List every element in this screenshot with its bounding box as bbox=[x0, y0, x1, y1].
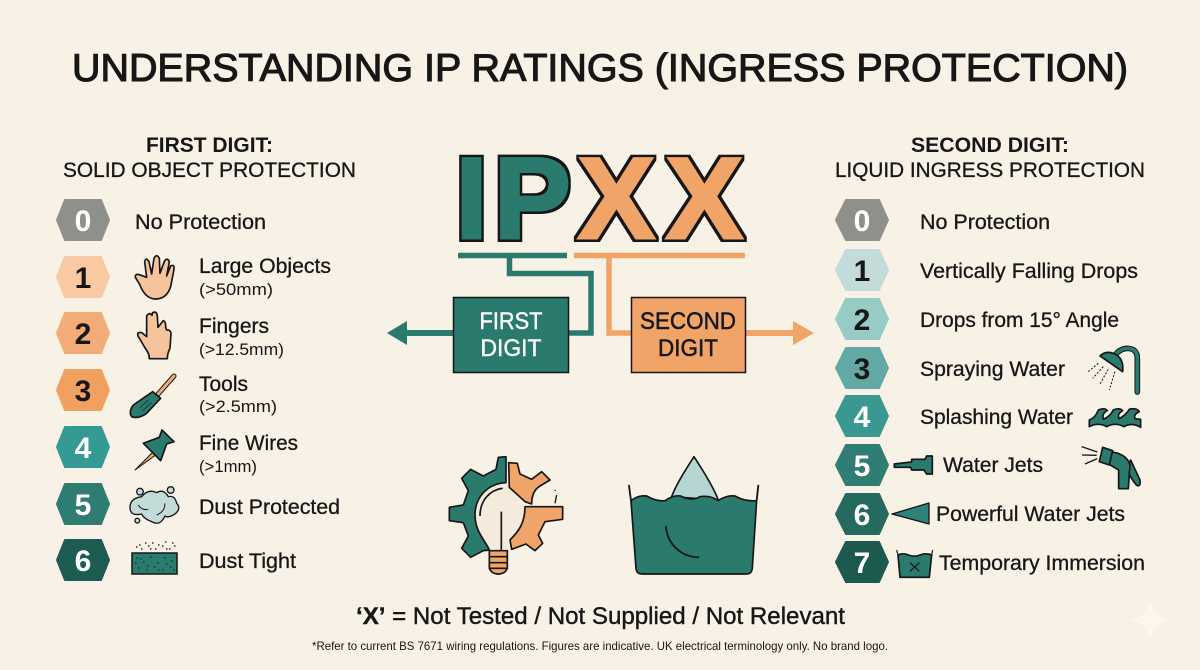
row 5: water jets bbox=[836, 445, 1140, 489]
row 4: splashing water bbox=[836, 396, 1141, 436]
icon: shower head bbox=[1088, 348, 1137, 392]
icon: drop in water basin bbox=[629, 457, 758, 574]
first digit connector bbox=[458, 256, 591, 333]
row 1: vertically falling drops: 1 bbox=[854, 255, 870, 288]
row 6: powerful water jets bbox=[836, 494, 1125, 534]
IPXX wordmark bbox=[456, 135, 743, 263]
legend: X meaning: ‘X’ = Not Tested / Not Supplied / Not Relevant bbox=[356, 603, 845, 630]
row 0: no protection: No Protection bbox=[135, 211, 266, 234]
icon: dust cloud bbox=[130, 487, 179, 523]
row 0: no protection: No Protection bbox=[920, 211, 1050, 234]
title: UNDERSTANDING IP RATINGS (INGRESS PROTECTION) bbox=[72, 47, 1128, 90]
row 2: drops from 15 degree angle: Drops from 15° Angle bbox=[920, 309, 1119, 332]
row 6: dust tight: Dust Tight bbox=[199, 550, 296, 573]
icon: spray gun bbox=[1082, 447, 1140, 489]
row 4: splashing water: Splashing Water bbox=[920, 406, 1073, 429]
box: second digit: SECOND bbox=[640, 308, 736, 335]
row 0: no protection: 0 bbox=[854, 205, 870, 238]
row 2: drops from 15 degree angle bbox=[836, 299, 1119, 339]
heading: first digit: SOLID OBJECT PROTECTION bbox=[63, 159, 356, 182]
row 5: dust protected: 5 bbox=[75, 489, 91, 522]
row 6: powerful water jets: Powerful Water Jets bbox=[936, 503, 1125, 526]
heading: first digit: FIRST DIGIT: bbox=[146, 134, 273, 157]
row 3: tools bbox=[57, 370, 277, 417]
row 4: fine wires: 4 bbox=[75, 432, 92, 465]
row 3: tools: 3 bbox=[75, 375, 91, 408]
footnote: *Refer to current BS 7671 wiring regulations. Figures are indicative. UK electrical terminology only. No brand logo. bbox=[312, 639, 888, 653]
row 4: fine wires bbox=[57, 427, 298, 476]
row 7: temporary immersion bbox=[836, 542, 1145, 582]
row 0: no protection bbox=[57, 200, 266, 240]
row 1: large objects: Large Objects bbox=[199, 255, 331, 278]
heading: second digit bbox=[835, 134, 1145, 182]
icon: screwdriver bbox=[130, 376, 174, 417]
row 4: fine wires: (>1mm) bbox=[199, 457, 257, 476]
row 5: water jets: 5 bbox=[854, 450, 870, 483]
row 1: large objects bbox=[57, 255, 331, 299]
box: first digit: DIGIT bbox=[480, 335, 542, 362]
row 1: large objects: (>50mm) bbox=[199, 280, 273, 299]
IPXX wordmark: P bbox=[494, 135, 571, 263]
row 0: no protection: 0 bbox=[75, 205, 91, 238]
row 5: dust protected: Dust Protected bbox=[199, 496, 340, 519]
row 2: fingers: 2 bbox=[75, 318, 91, 351]
row 4: splashing water: 4 bbox=[854, 401, 871, 434]
icon: jet nozzle bbox=[894, 456, 932, 474]
box: second digit bbox=[632, 298, 746, 372]
panel: second digit liquid ingress protection bbox=[835, 134, 1145, 582]
icon: push pin bbox=[135, 430, 174, 470]
icon: sparkle watermark bbox=[1129, 600, 1171, 640]
IPXX wordmark: X bbox=[666, 135, 743, 263]
row 6: powerful water jets: 6 bbox=[854, 499, 870, 532]
row 0: no protection bbox=[836, 200, 1050, 240]
icon: open hand bbox=[135, 256, 174, 299]
second digit connector bbox=[574, 256, 745, 333]
row 6: dust tight bbox=[57, 540, 296, 580]
icon: two fingers hand bbox=[138, 312, 171, 359]
panel: IPXX central diagram bbox=[387, 135, 814, 574]
IPXX wordmark: X bbox=[578, 135, 655, 263]
row 7: temporary immersion: 7 bbox=[854, 547, 870, 580]
row 4: fine wires: Fine Wires bbox=[199, 432, 298, 455]
row 3: tools: (>2.5mm) bbox=[199, 397, 277, 416]
heading: second digit: LIQUID INGRESS PROTECTION bbox=[835, 159, 1145, 182]
row 1: vertically falling drops bbox=[836, 250, 1138, 290]
row 5: dust protected bbox=[57, 484, 340, 524]
icon: waves bbox=[1089, 409, 1141, 427]
row 2: fingers: Fingers bbox=[199, 315, 269, 338]
row 3: tools: Tools bbox=[199, 373, 248, 396]
row 2: fingers: (>12.5mm) bbox=[199, 340, 284, 359]
panel: first digit solid object protection bbox=[57, 134, 356, 580]
heading: second digit: SECOND DIGIT: bbox=[911, 134, 1069, 157]
icon: immersion basin bbox=[897, 550, 933, 577]
row 1: vertically falling drops: Vertically Falling Drops bbox=[920, 260, 1138, 283]
icon: gear and light bulb bbox=[449, 457, 563, 574]
row 7: temporary immersion: Temporary Immersion bbox=[939, 552, 1145, 575]
box: second digit: DIGIT bbox=[658, 335, 718, 362]
box: first digit bbox=[454, 298, 568, 372]
box: first digit: FIRST bbox=[480, 308, 543, 335]
row 3: spraying water bbox=[836, 348, 1137, 392]
row 2: drops from 15 degree angle: 2 bbox=[854, 304, 870, 337]
IPXX wordmark: I bbox=[456, 135, 487, 263]
arrow: right to second digit list bbox=[746, 321, 814, 345]
row 2: fingers bbox=[57, 312, 284, 359]
row 5: water jets: Water Jets bbox=[943, 454, 1043, 477]
icon: cone jet bbox=[892, 503, 929, 524]
icon: dust tight block bbox=[132, 542, 177, 574]
row 3: spraying water: Spraying Water bbox=[920, 358, 1065, 381]
heading: first digit bbox=[63, 134, 356, 182]
row 6: dust tight: 6 bbox=[75, 545, 91, 578]
row 3: spraying water: 3 bbox=[854, 353, 870, 386]
arrow: left to first digit list bbox=[387, 321, 453, 345]
row 1: large objects: 1 bbox=[75, 262, 91, 295]
